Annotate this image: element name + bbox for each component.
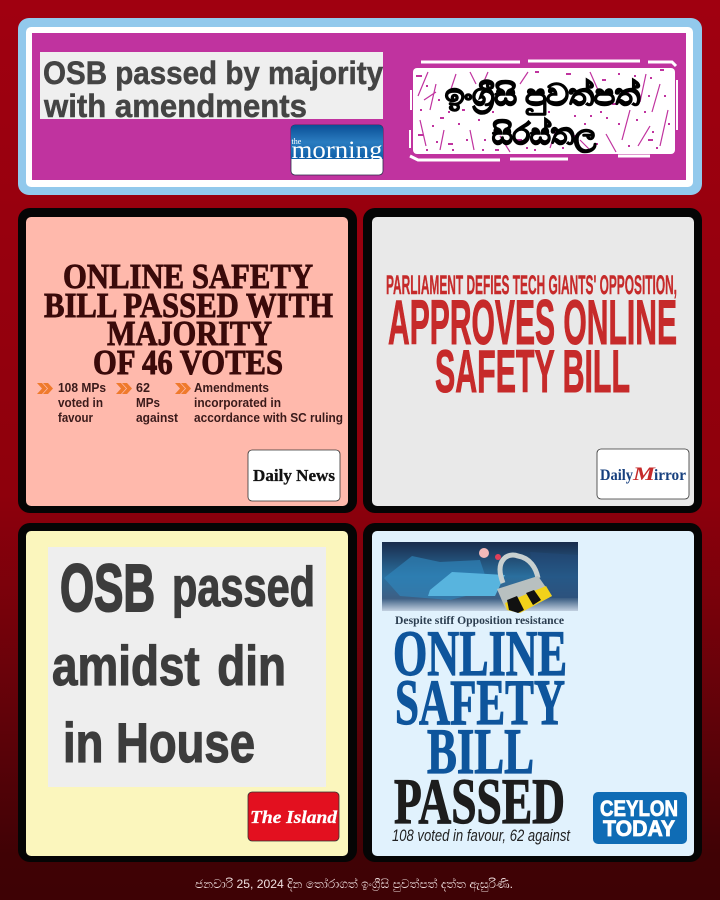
stamp: section title (410, 61, 677, 160)
headline: The Island: in House (63, 711, 255, 774)
headline: Daily News: ONLINE SAFETY (63, 257, 313, 296)
panel: Daily News (18, 208, 357, 513)
stamp text: සිරස්තල (492, 118, 596, 153)
bullet: 62 MPs: 62 (136, 380, 150, 395)
bullet: 108 MPs (37, 380, 106, 425)
headline: Ceylon Today: BILL (427, 716, 534, 788)
headline: Ceylon Today: PASSED (394, 766, 565, 838)
bullet: 62 MPs: against (136, 410, 179, 425)
logo: Daily News: Daily News (253, 466, 335, 485)
headline: The Island: OSB (60, 551, 155, 626)
stamp text (445, 79, 641, 153)
logo: Daily News (248, 450, 340, 501)
padlock (497, 555, 552, 613)
headline: The Morning (40, 52, 383, 124)
headline: Daily News: MAJORITY (107, 314, 272, 353)
bullet: amendments: incorporated in (194, 395, 281, 410)
logo: The Island (248, 792, 339, 841)
stamp text: ඉංග්‍රීසි පුවත්පත් (445, 79, 641, 116)
headline: Ceylon Today (393, 618, 567, 838)
headline: The Island (48, 547, 326, 787)
bullet: amendments: accordance with SC ruling (194, 410, 343, 425)
logo: Ceylon Today (593, 792, 687, 844)
headline: Daily News (44, 257, 333, 382)
panel: Daily Mirror (363, 208, 702, 513)
footer source note: ජනවාරි 25, 2024 දින තෝරාගත් ඉංග්‍රීසි පුවත්පත් දත්ත ඇසුරිණි. (195, 877, 513, 892)
stamp scratches (416, 70, 670, 152)
logo: Daily Mirror: Daily (600, 467, 633, 484)
logo: Daily Mirror (597, 449, 689, 499)
logo: Daily Mirror: M (632, 464, 656, 485)
headline: Ceylon Today: SAFETY (395, 667, 565, 739)
logo: The Island: The Island (250, 807, 338, 827)
subhead: 108 voted in favour, 62 against (392, 826, 571, 845)
panel: header banner (18, 18, 702, 195)
bullet: amendments (175, 380, 343, 425)
bullet: 62 MPs: MPs (136, 395, 160, 410)
panel: The Island (18, 523, 357, 862)
logo: Daily Mirror: irror (654, 467, 686, 484)
headline: Daily News: OF 46 VOTES (93, 343, 283, 382)
headline: The Island: amidst din (52, 634, 286, 697)
headline: The Morning: OSB passed by majority (43, 55, 383, 91)
bullet: 62 MPs (116, 380, 179, 425)
logo: the morning: morning (292, 137, 383, 164)
logo: Ceylon Today: CEYLON (600, 796, 678, 821)
logo: Ceylon Today: TODAY (603, 816, 675, 841)
logo: the morning: the (292, 137, 302, 146)
photo: padlock over tablet (382, 542, 578, 613)
headline: Daily Mirror (386, 270, 677, 405)
kicker: Despite stiff Opposition resistance (395, 615, 564, 627)
headline: The Morning: with amendments (43, 88, 307, 124)
logo: the morning (291, 125, 383, 175)
bullet: 108 MPs: 108 MPs (58, 380, 106, 395)
headline: Ceylon Today: ONLINE (393, 618, 567, 690)
bullet: 108 MPs: voted in (58, 395, 103, 410)
bullet: amendments: Amendments (194, 380, 269, 395)
headline: The Island: passed (172, 555, 315, 618)
panel: Ceylon Today (363, 523, 702, 862)
bullet: 108 MPs: favour (58, 410, 93, 425)
headline: Daily News: BILL PASSED WITH (44, 286, 333, 325)
